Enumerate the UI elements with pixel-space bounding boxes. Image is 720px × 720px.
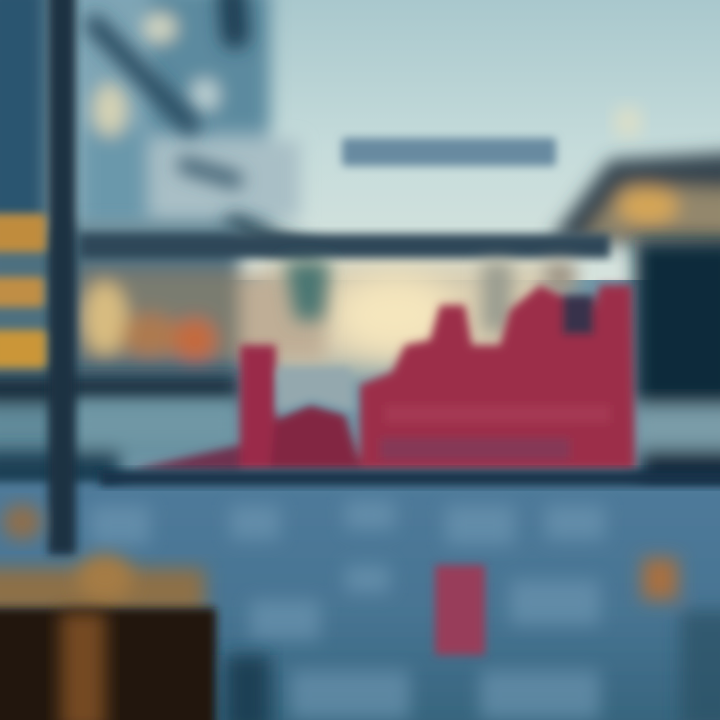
sky glow [614,106,642,138]
banner: blurred title bar [342,138,556,166]
chart: red reflection bar [435,565,485,655]
lights: orange lit windows [0,214,46,368]
sunset horizon glow [260,260,560,370]
lower deck [0,400,240,510]
pole: dark vertical column [48,0,76,555]
water: blue lower surface [0,482,720,720]
foreground: dark crate lower left [0,554,216,720]
background: mid-left windows [0,225,325,380]
bar: middle low block [270,405,362,470]
building: right dark block [635,240,720,495]
gap: dark notch in bars [562,295,594,335]
bars: blurred chart text [385,405,610,423]
band: navy baseline [100,470,720,486]
bar: low left wedge [130,445,240,472]
band: mid-left dark rail [0,375,240,452]
water: reflections [90,500,605,720]
bars: lower muted strip [380,438,570,460]
light: orange reflection right [642,558,720,720]
overlay: grey panel between bars [277,368,355,412]
building: right pavilion [550,152,720,250]
building: left glass tower [0,0,300,230]
chart: red bar skyline [130,285,635,472]
background: sky [0,0,720,280]
foreground: dark post bottom [225,655,270,720]
light: orange reflection left [2,504,42,540]
bar: left tall column [240,345,276,470]
beam: hanging supports [285,262,575,332]
building: diagonal dark struts [95,0,310,255]
beam: horizontal walkway [80,234,610,258]
